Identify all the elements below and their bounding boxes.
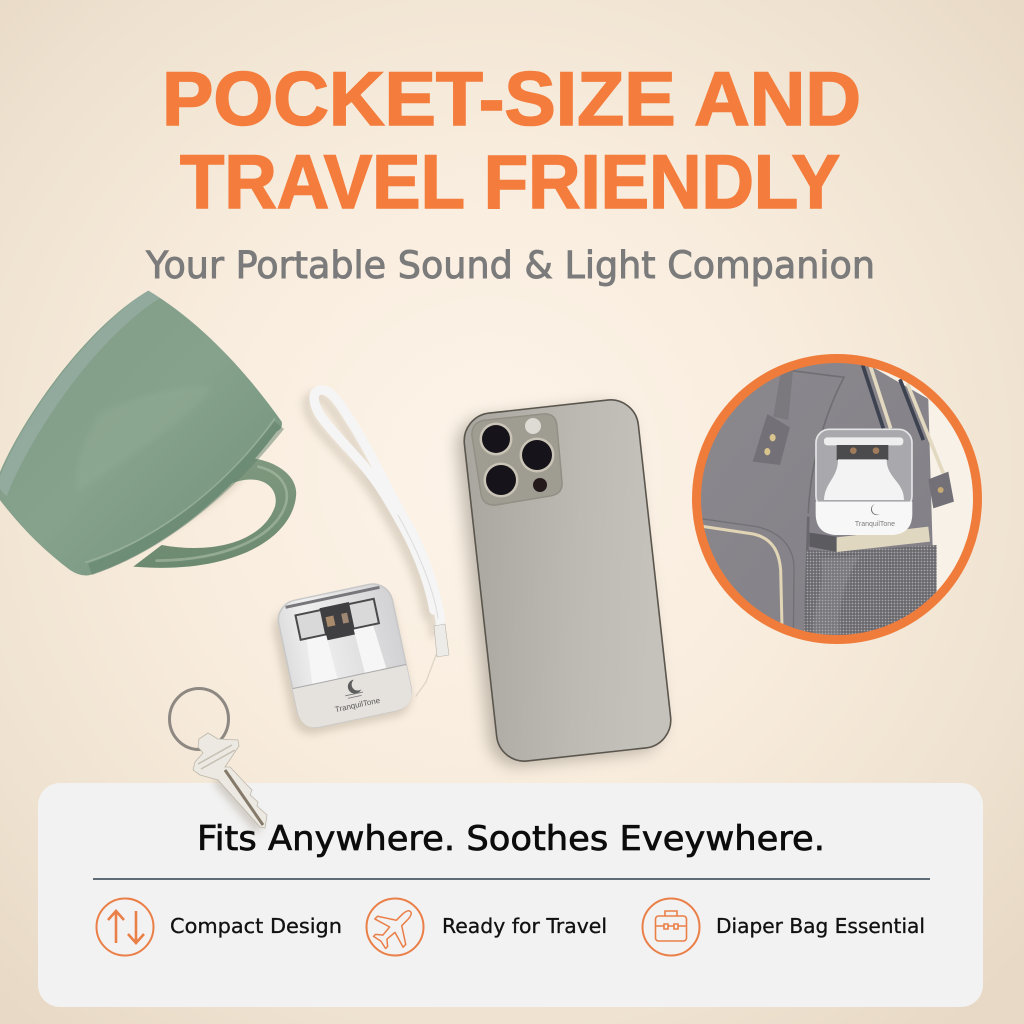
key ring: [170, 688, 228, 750]
backpack body: [701, 363, 933, 631]
shoulder strap: [863, 365, 923, 440]
feature: compact design: [96, 898, 342, 956]
icon: airplane: [365, 897, 425, 957]
icon: arrows: [96, 898, 154, 956]
strap tab: [928, 472, 954, 508]
handle and tab: [773, 367, 793, 420]
inset ring: [696, 358, 978, 640]
mesh pocket: [804, 545, 937, 635]
inset: device in diaper bag: [701, 363, 973, 635]
panel heading: Fits Anywhere. Soothes Eveywhere.: [197, 819, 825, 859]
pocket band: [809, 533, 837, 552]
camera module: [472, 414, 562, 505]
panel: bottom card: [38, 783, 983, 1007]
subtitle: Your Portable Sound & Light Companion: [145, 244, 875, 287]
phone: [454, 397, 674, 769]
product device: TranquilTone: TranquilTone: [334, 696, 381, 714]
key: [193, 733, 267, 833]
title: POCKET-SIZE AND: [162, 57, 861, 142]
front pocket and zipper: [702, 518, 794, 628]
mug: [0, 291, 296, 584]
product device: TranquilTone: [268, 580, 416, 738]
keys: [170, 688, 267, 833]
logo: moon: [342, 678, 364, 699]
wrist strap: [307, 390, 449, 696]
feature: ready for travel: [365, 897, 607, 957]
device in pocket: [816, 429, 912, 535]
feature: diaper bag essential: [642, 898, 925, 956]
title: TRAVEL FRIENDLY: [180, 140, 840, 225]
title: [162, 57, 861, 225]
feature: diaper bag essential: Diaper Bag Essential: [716, 914, 925, 938]
icon: briefcase: [642, 898, 700, 956]
feature: ready for travel: Ready for Travel: [442, 914, 607, 938]
device in pocket: TranquilTone: [855, 521, 895, 528]
feature: compact design: Compact Design: [170, 914, 342, 938]
